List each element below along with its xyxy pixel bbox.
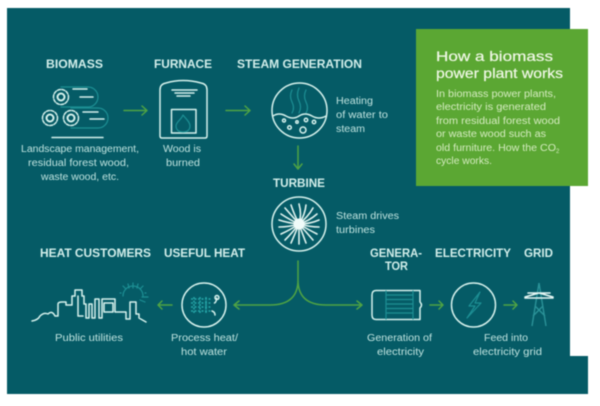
icon: city skyline with sun <box>32 283 148 322</box>
icon: generator <box>372 290 422 320</box>
grid caption <box>473 333 542 358</box>
icon: steam generation <box>272 83 327 138</box>
icon: electricity <box>452 283 496 327</box>
useful heat caption <box>171 333 238 358</box>
icon: turbine <box>272 197 326 251</box>
turbine caption: turbines <box>336 225 375 236</box>
heading: electricity: ELECTRICITY <box>435 246 511 260</box>
heading: furnace: FURNACE <box>154 57 212 71</box>
panel body text: or waste wood such as <box>436 129 546 140</box>
panel: how a biomass plant works <box>416 29 588 186</box>
generator caption: electricity <box>377 347 424 358</box>
steam caption: of water to <box>336 110 388 121</box>
panel body text: electricity is generated <box>436 102 546 113</box>
icon: furnace <box>160 80 207 138</box>
heading: generator: GENERA- <box>370 246 422 260</box>
grid caption: electricity grid <box>473 347 542 358</box>
panel body text: old furniture. How the CO <box>436 143 556 154</box>
furnace caption: Wood is <box>163 144 201 155</box>
turbine caption: Steam drives <box>336 211 399 222</box>
arrow: generator to electricity <box>430 301 443 309</box>
heading: generator <box>370 246 422 273</box>
panel body text: cycle works. <box>436 156 492 167</box>
icon: biomass logs <box>42 87 108 138</box>
heading: generator: TOR <box>385 259 408 273</box>
arrow: electricity to grid <box>504 301 517 309</box>
panel heading second line: power plant works <box>436 65 563 81</box>
icon: useful heat <box>182 283 226 327</box>
panel body text: 2 <box>556 149 560 155</box>
steam caption <box>336 96 388 135</box>
grid caption: Feed into <box>484 333 528 344</box>
arrow: biomass to furnace <box>124 106 147 115</box>
turbine caption <box>336 211 399 236</box>
heading: grid: GRID <box>524 246 553 260</box>
arrow: furnace to steam <box>226 106 250 115</box>
biomass caption <box>21 144 139 183</box>
heading: turbine: TURBINE <box>273 176 325 190</box>
heading: steam generation: STEAM GENERATION <box>237 57 362 71</box>
furnace caption <box>163 144 201 169</box>
useful heat caption: hot water <box>181 347 228 358</box>
useful heat caption: Process heat/ <box>171 333 238 344</box>
arrow: turbine splitting to heat and generator <box>234 261 362 309</box>
steam caption: steam <box>336 124 365 135</box>
generator caption: Generation of <box>367 333 432 344</box>
heading: biomass: BIOMASS <box>46 57 103 71</box>
icon: pylon <box>525 283 553 326</box>
panel body text: In biomass power plants, <box>436 89 556 100</box>
panel body text: from residual forest wood <box>436 116 560 127</box>
furnace caption: burned <box>166 158 200 169</box>
customers caption: Public utilities <box>55 333 123 344</box>
panel body text <box>436 89 560 167</box>
arrow: useful heat to customers <box>158 301 172 309</box>
biomass caption: Landscape management, <box>21 144 139 155</box>
biomass caption: residual forest wood, <box>28 158 129 169</box>
panel heading: How a biomass <box>436 48 553 64</box>
generator caption <box>367 333 432 358</box>
heading: useful heat: USEFUL HEAT <box>164 246 246 260</box>
heading: heat customers: HEAT CUSTOMERS <box>40 246 151 260</box>
biomass caption: waste wood, etc. <box>40 172 119 183</box>
arrow: steam to turbine <box>294 146 302 169</box>
steam caption: Heating <box>336 96 373 107</box>
